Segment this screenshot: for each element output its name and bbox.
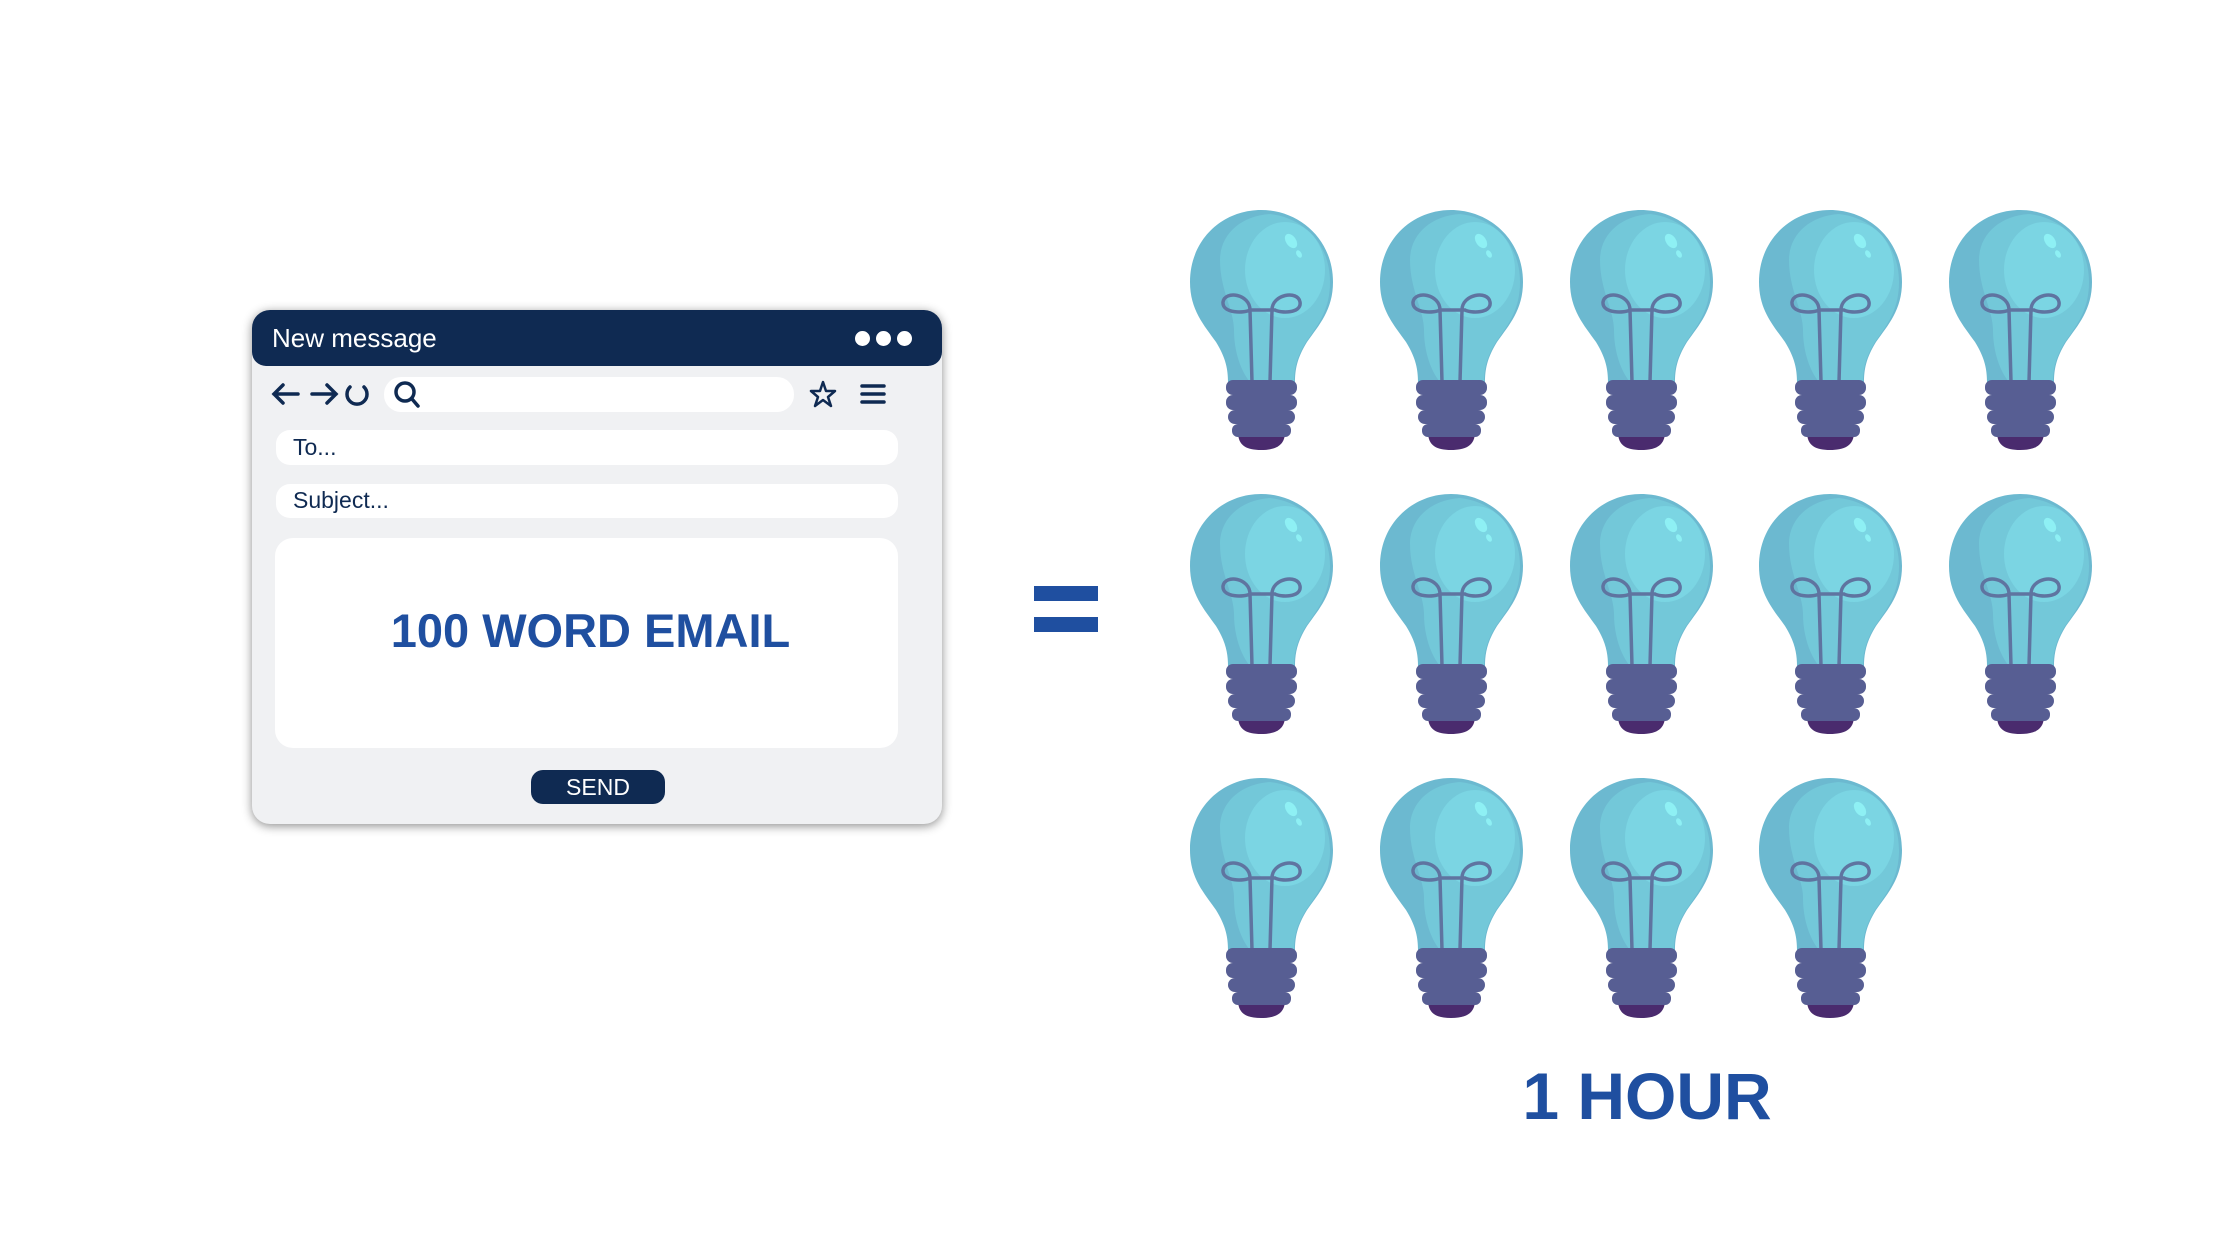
field: to: To... — [293, 434, 336, 460]
panel: email window — [252, 310, 942, 824]
field: to — [276, 430, 898, 465]
toolbar — [272, 377, 886, 412]
icon: equals sign — [1034, 586, 1098, 632]
button: send — [531, 770, 665, 804]
body: 100 word email — [275, 538, 898, 748]
button: send: SEND — [566, 774, 630, 800]
label: 1 hour: 1 HOUR — [1522, 1059, 1772, 1133]
header title: New message — [272, 323, 437, 353]
header bar — [252, 310, 942, 366]
body: 100 word email: 100 WORD EMAIL — [391, 604, 790, 656]
bulbs grid — [1190, 210, 2092, 1018]
icon: dots — [855, 331, 912, 346]
field: subject: Subject... — [293, 487, 389, 513]
field: subject — [276, 484, 898, 518]
